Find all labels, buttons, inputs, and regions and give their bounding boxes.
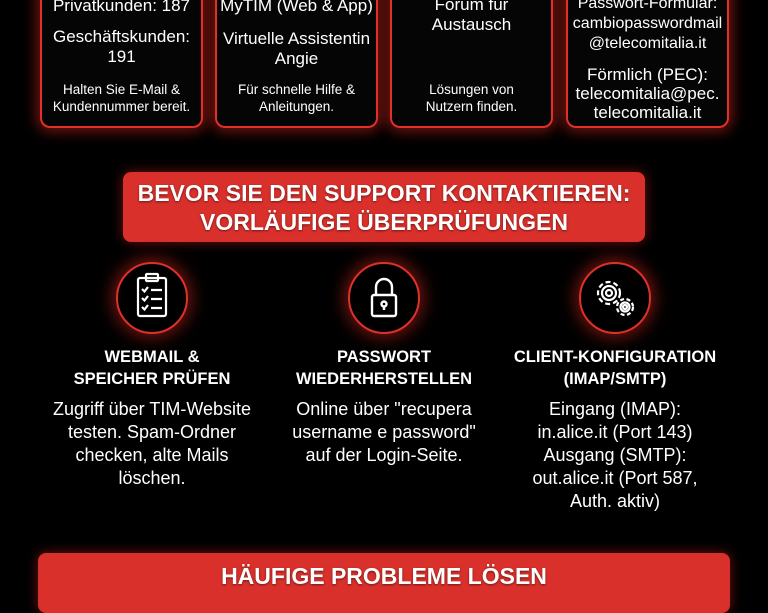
column: webmail: WEBMAIL & (104, 348, 200, 366)
card: forum: Lösungen von (429, 82, 514, 97)
icon: gears (579, 262, 651, 334)
column: webmail: SPEICHER PRÜFEN (74, 370, 230, 388)
card: forum: Austausch (432, 15, 511, 34)
card: MyTIM: Anleitungen. (259, 99, 334, 114)
card: phone support: Geschäftskunden: (53, 27, 190, 46)
card: password form: cambiopasswordmail (573, 15, 722, 32)
card: password form: @telecomitalia.it (589, 35, 706, 52)
column: password (292, 348, 476, 465)
banner: preliminary checks: VORLÄUFIGE ÜBERPRÜFUNGEN (200, 209, 568, 235)
column: client config (514, 348, 716, 511)
icon: clipboard (116, 262, 188, 334)
card: phone support (40, 0, 203, 128)
column: webmail: löschen. (118, 468, 186, 488)
column: client config: Ausgang (SMTP): (543, 445, 687, 465)
banner: preliminary checks: BEVOR SIE DEN SUPPORT KONTAKTIEREN: (138, 180, 630, 206)
card: password form: Förmlich (PEC): (587, 65, 708, 84)
banner: preliminary checks (123, 172, 645, 242)
card: MyTIM: Angie (275, 49, 318, 68)
card: MyTIM: Virtuelle Assistentin (223, 29, 370, 48)
column: client config: (IMAP/SMTP) (564, 370, 666, 388)
column: password: username e password" (292, 422, 476, 442)
card: password form (566, 0, 729, 128)
card: phone support: Halten Sie E-Mail & (63, 82, 180, 97)
column: client config: Eingang (IMAP): (549, 399, 681, 419)
card: password form: telecomitalia.it (594, 103, 701, 122)
column: password: auf der Login-Seite. (305, 445, 463, 465)
card: password form: telecomitalia@pec. (576, 84, 719, 103)
column: password: PASSWORT (337, 348, 431, 366)
column: client config: out.alice.it (Port 587, (532, 468, 698, 488)
column: webmail: checken, alte Mails (75, 445, 229, 465)
column: client config: in.alice.it (Port 143) (537, 422, 693, 442)
card: phone support: Kundennummer bereit. (53, 99, 190, 114)
card: phone support: 191 (107, 47, 136, 66)
column: client config: Auth. aktiv) (570, 491, 660, 511)
icon: padlock (348, 262, 420, 334)
column: client config: CLIENT-KONFIGURATION (514, 348, 716, 366)
card: MyTIM: Für schnelle Hilfe & (238, 82, 355, 97)
card: forum (390, 0, 553, 128)
card: forum: Nutzern finden. (426, 99, 517, 114)
column: password: Online über "recupera (296, 399, 472, 419)
card: MyTIM (215, 0, 378, 128)
column: webmail: Zugriff über TIM-Website (53, 399, 251, 419)
column: password: WIEDERHERSTELLEN (296, 370, 472, 388)
column: webmail: testen. Spam-Ordner (68, 422, 236, 442)
banner: common problems (38, 553, 730, 613)
column: webmail (53, 348, 251, 488)
banner: common problems: HÄUFIGE PROBLEME LÖSEN (221, 563, 547, 589)
